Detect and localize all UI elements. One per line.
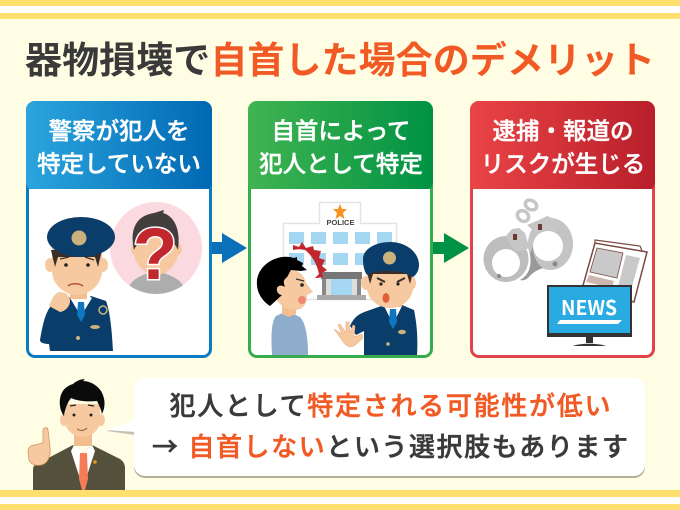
- heading: panel 1: 警察が犯人を: [48, 118, 190, 144]
- icon: police station building: POLICE: [327, 218, 354, 227]
- icon: surprised man: [257, 257, 313, 355]
- title: 器物損壊で自首した場合のデメリット: [25, 39, 655, 81]
- icon: unknown culprit with question mark: ?: [133, 214, 177, 295]
- icon: unknown culprit with question mark: [110, 202, 202, 296]
- icon: stern police officer: [334, 242, 419, 355]
- icon: newspaper: [582, 240, 647, 302]
- callout text: → 自首しないという選択肢もあります: [152, 427, 628, 464]
- icon: news monitor: [547, 285, 632, 346]
- panel: risk of arrest and media coverage: [470, 101, 655, 358]
- heading: panel 1: 特定していない: [37, 151, 201, 177]
- heading: panel 2: 犯人として特定: [259, 151, 423, 177]
- icon: news monitor: NEWS: [561, 291, 617, 321]
- icon: worried police officer: [40, 217, 115, 351]
- heading: panel 2: 自首によって: [271, 118, 411, 144]
- character: lawyer pointing up: [28, 379, 125, 490]
- callout: speech bubble: [107, 378, 645, 478]
- icon: red burst surprise mark: [293, 242, 327, 278]
- arrow: panel 1 to 2: [212, 233, 247, 263]
- icon: handcuffs: [484, 198, 573, 282]
- heading: panel 3: リスクが生じる: [481, 151, 645, 177]
- callout text: 犯人として特定される可能性が低い: [170, 391, 610, 421]
- heading: panel 3: 逮捕・報道の: [492, 118, 634, 144]
- arrow: panel 2 to 3: [433, 233, 469, 263]
- panel: police have not identified the culprit: [26, 101, 212, 358]
- panel: identified as culprit by surrender: [248, 101, 433, 358]
- icon: police station building: [284, 202, 396, 300]
